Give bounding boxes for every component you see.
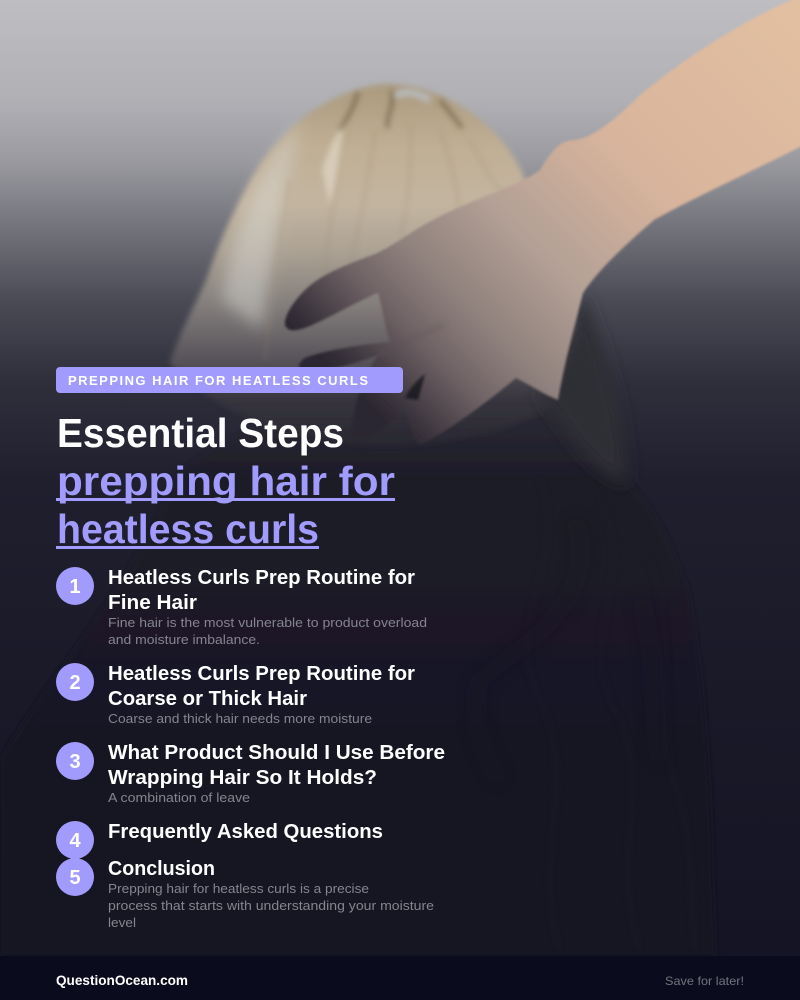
step 2: Coarse or Thick Hair bbox=[108, 688, 307, 710]
subtle strands in lower hair bbox=[527, 480, 695, 950]
step 3: 3 bbox=[69, 751, 81, 773]
step 2: 2 bbox=[69, 672, 81, 694]
hair highlights and roots bbox=[222, 90, 500, 360]
step 5: 5 bbox=[69, 867, 81, 889]
step 2 bbox=[56, 663, 415, 726]
step 4 bbox=[56, 821, 383, 859]
footer brand: QuestionOcean.com bbox=[56, 972, 188, 988]
footer note: Save for later! bbox=[665, 974, 744, 988]
arm and hand bbox=[285, 0, 800, 445]
step 3: Wrapping Hair So It Holds? bbox=[108, 767, 377, 789]
title bbox=[56, 410, 395, 552]
step 3 bbox=[56, 742, 445, 805]
step 2: Heatless Curls Prep Routine for bbox=[108, 663, 415, 685]
step 1: Fine hair is the most vulnerable to product overload bbox=[108, 615, 427, 630]
finger shadows bbox=[378, 325, 445, 400]
title: prepping hair for bbox=[57, 458, 395, 504]
step 3: What Product Should I Use Before bbox=[108, 742, 445, 764]
footer bar bbox=[0, 956, 800, 1000]
step 1 bbox=[56, 567, 427, 647]
step 2: Coarse and thick hair needs more moisture bbox=[108, 711, 372, 726]
step 5: Prepping hair for heatless curls is a precise bbox=[108, 881, 369, 896]
step 1: Heatless Curls Prep Routine for bbox=[108, 567, 415, 589]
step 5: level bbox=[108, 915, 136, 930]
step 5: Conclusion bbox=[108, 858, 215, 880]
step 4: Frequently Asked Questions bbox=[108, 821, 383, 843]
step 5: process that starts with understanding your moisture bbox=[108, 898, 434, 913]
category badge: PREPPING HAIR FOR HEATLESS CURLS bbox=[68, 373, 368, 388]
step 1: Fine Hair bbox=[108, 592, 197, 614]
category badge bbox=[56, 367, 403, 393]
step 3: A combination of leave bbox=[108, 790, 250, 805]
title: heatless curls bbox=[57, 506, 319, 552]
blonde hair crown bbox=[170, 84, 590, 445]
step 4: 4 bbox=[69, 830, 81, 852]
lower hair mass bbox=[0, 345, 716, 956]
step 5 bbox=[56, 858, 434, 930]
title: Essential Steps bbox=[57, 410, 344, 456]
step 1: and moisture imbalance. bbox=[108, 632, 260, 647]
hair below the hand bbox=[540, 293, 628, 483]
step 1: 1 bbox=[69, 576, 81, 598]
